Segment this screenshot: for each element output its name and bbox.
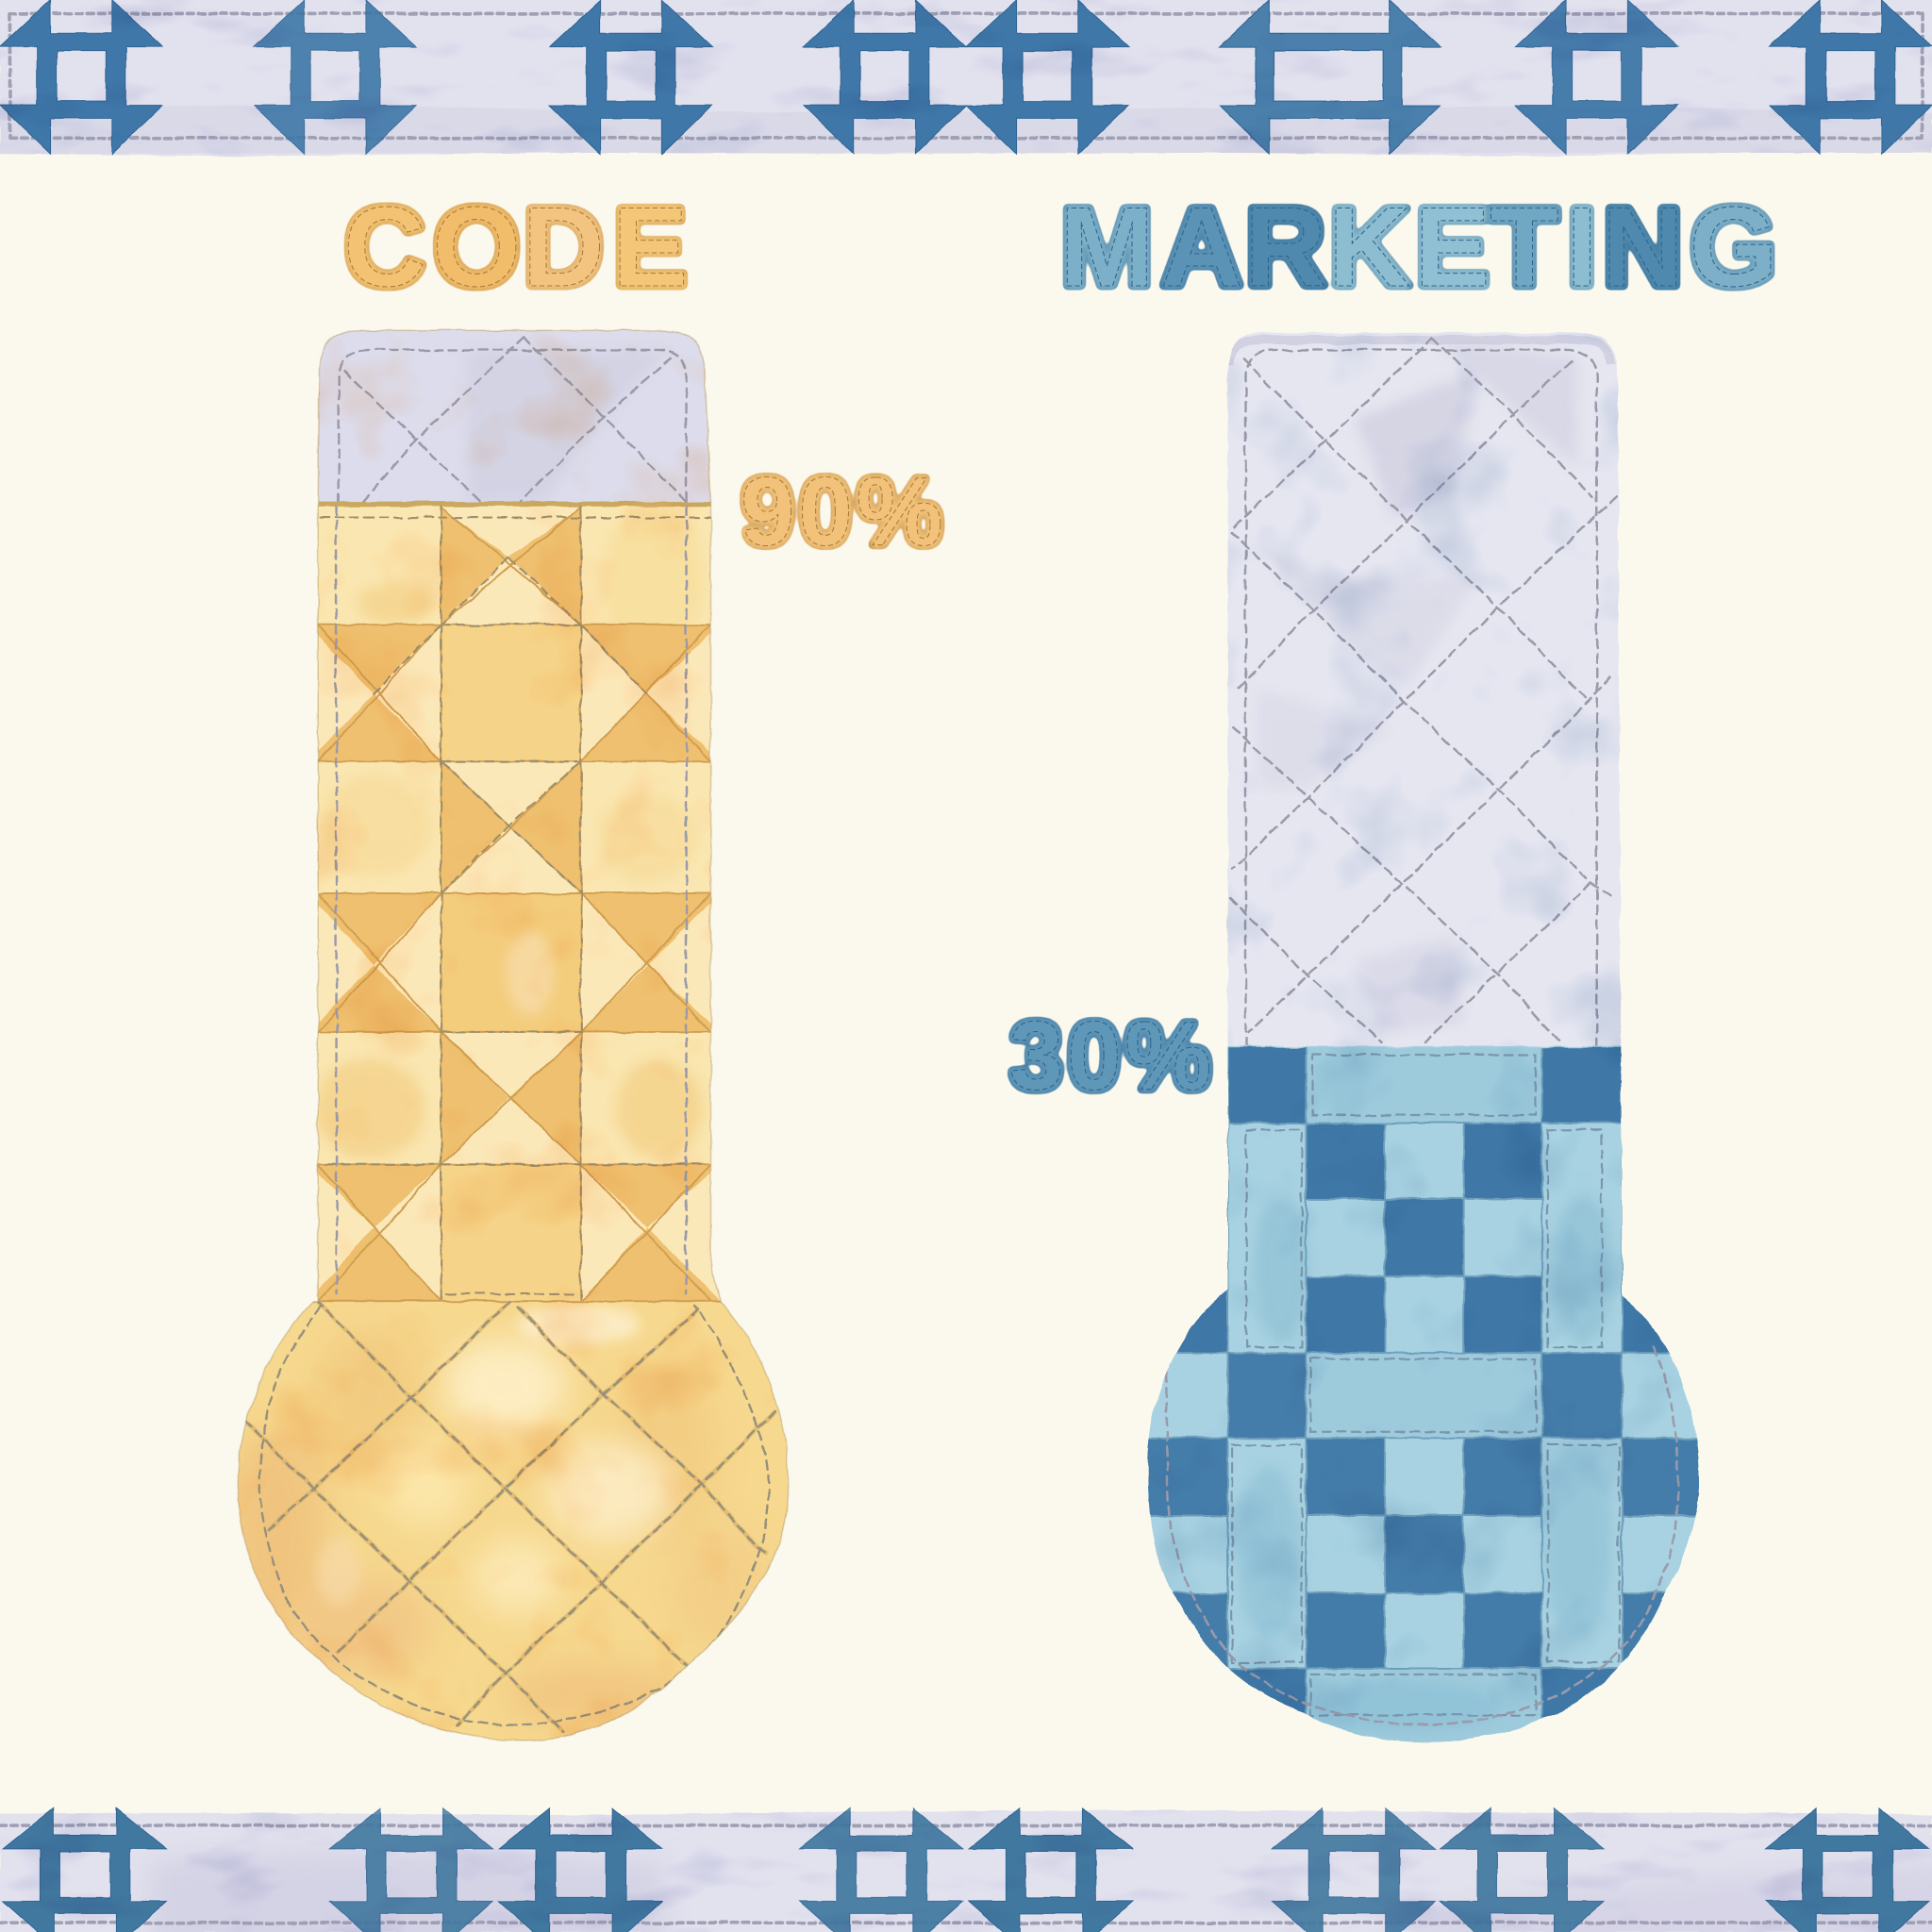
heading: MARKETING: N bbox=[1602, 184, 1684, 310]
icon: churn dash block 5 bbox=[966, 0, 1128, 154]
icon: bottom churn dash block 1 bbox=[3, 1808, 166, 1932]
icon: bottom churn dash block 3 bbox=[499, 1808, 662, 1932]
icon: bottom churn dash block 7 bbox=[1441, 1808, 1604, 1932]
heading: MARKETING: E bbox=[1414, 184, 1491, 310]
value label: 30%: % bbox=[1124, 1002, 1211, 1110]
value label: 90%: 0 bbox=[798, 457, 853, 565]
icon: churn dash block 4 bbox=[804, 0, 966, 154]
thermometer empty section, lavender quilting bbox=[1220, 323, 1633, 1050]
heading: MARKETING: T bbox=[1490, 184, 1559, 310]
heading: MARKETING: G bbox=[1690, 184, 1777, 310]
icon: bottom churn dash block 4 bbox=[800, 1808, 963, 1932]
thermometer empty section, lavender quilting bbox=[308, 321, 721, 504]
quilt star triangles bbox=[308, 507, 721, 1301]
value label: 30%: 3 bbox=[1009, 1002, 1063, 1110]
value label: 90%: 9 bbox=[741, 457, 794, 565]
heading: MARKETING: I bbox=[1566, 184, 1597, 310]
panel: bottom quilted border bbox=[0, 1808, 1932, 1932]
heading: MARKETING: K bbox=[1328, 184, 1410, 310]
dark checker squares bbox=[1140, 1047, 1707, 1750]
icon: bottom churn dash block 2 bbox=[329, 1808, 492, 1932]
thermometer fill column, 90% yellow quilt blocks bbox=[308, 502, 721, 1304]
icon: churn dash block 2 bbox=[254, 0, 416, 154]
value label: 30%: 0 bbox=[1067, 1002, 1121, 1110]
heading: MARKETING: R bbox=[1244, 184, 1326, 310]
icon: churn dash block 1 bbox=[0, 0, 162, 154]
icon: wide churn dash block bbox=[1220, 0, 1441, 154]
icon: churn dash block 7 bbox=[1516, 0, 1678, 154]
panel: top quilted border bbox=[0, 0, 1932, 157]
value label: 90%: % bbox=[857, 457, 943, 565]
heading: MARKETING: A bbox=[1160, 184, 1242, 310]
heading: MARKETING: M bbox=[1059, 184, 1154, 310]
icon: churn dash block 3 bbox=[550, 0, 712, 154]
heading: CODE: C bbox=[343, 184, 425, 310]
heading: CODE: E bbox=[612, 184, 688, 310]
panel: MARKETING thermometer bbox=[1140, 323, 1707, 1750]
panel: CODE thermometer bbox=[228, 321, 801, 1751]
heading: CODE: O bbox=[432, 184, 521, 310]
thermometer bulb, quilted diamonds bbox=[228, 1300, 801, 1751]
icon: bottom churn dash block 6 bbox=[1273, 1808, 1436, 1932]
thermometer fill, 30% blue patchwork bbox=[1140, 1046, 1707, 1750]
icon: bottom churn dash block 5 bbox=[969, 1808, 1132, 1932]
heading: CODE: D bbox=[523, 184, 605, 310]
icon: churn dash block 8 bbox=[1770, 0, 1932, 154]
icon: bottom churn dash block 8 bbox=[1766, 1808, 1929, 1932]
